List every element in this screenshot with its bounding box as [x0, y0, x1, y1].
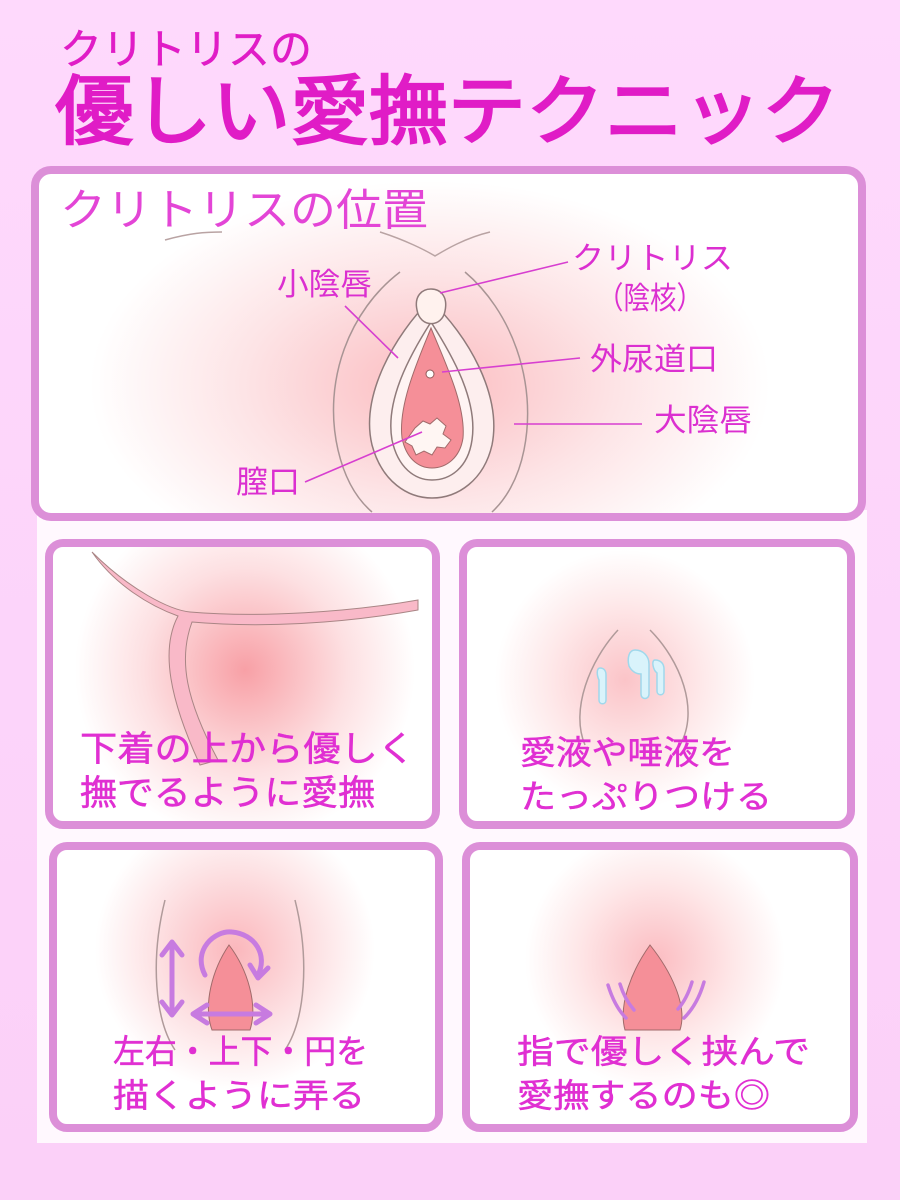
- labels: 大陰唇: [654, 403, 752, 438]
- caption: [80, 730, 415, 813]
- caption: 指で優しく挟んで: [517, 1033, 810, 1070]
- up-down arrow: [162, 942, 182, 1015]
- caption: 愛撫するのも◎: [517, 1077, 770, 1114]
- droplets: [597, 650, 664, 704]
- caption: [113, 1033, 368, 1114]
- simplified outline: [623, 945, 682, 1030]
- caption: 左右・上下・円を: [113, 1033, 368, 1070]
- labels: クリトリス: [572, 241, 733, 276]
- labels: 外尿道口: [590, 342, 718, 377]
- caption: 下着の上から優しく: [80, 730, 415, 769]
- panel heading: クリトリスの位置: [60, 186, 428, 235]
- labels: 膣口: [236, 465, 300, 500]
- labels: （陰核）: [597, 281, 703, 316]
- lower white sheet: [37, 510, 867, 1143]
- title: main line: 優しい愛撫テクニック: [55, 70, 840, 155]
- anatomical diagram: [165, 232, 528, 512]
- panel: over underwear: [49, 543, 436, 825]
- urethral opening: [426, 370, 434, 378]
- vaginal opening: [405, 418, 451, 455]
- arrows: [162, 932, 270, 1023]
- labels: [236, 241, 752, 500]
- motion marks: [608, 982, 704, 1018]
- simplified outline: [208, 945, 253, 1030]
- panel: clitoris position: [35, 170, 862, 517]
- title: small line: クリトリスの: [60, 26, 312, 73]
- panel: add lubrication: [463, 543, 851, 825]
- simplified outline: [580, 630, 688, 745]
- clitoris: [416, 289, 446, 324]
- panel: gentle pressure: [466, 846, 854, 1128]
- caption: たっぷりつける: [520, 778, 772, 815]
- caption: 描くように弄る: [113, 1077, 365, 1114]
- caption: 撫でるように愛撫: [80, 774, 375, 813]
- left-right arrow: [193, 1005, 270, 1023]
- title: [55, 26, 840, 155]
- panel: motion directions: [53, 846, 439, 1128]
- caption: [520, 734, 772, 815]
- circular arrow: [201, 932, 268, 978]
- caption: 愛液や唾液を: [520, 734, 735, 771]
- caption: [517, 1033, 810, 1114]
- labels: 小陰唇: [277, 267, 372, 302]
- label leader lines: [305, 262, 642, 482]
- underwear band: [92, 552, 418, 765]
